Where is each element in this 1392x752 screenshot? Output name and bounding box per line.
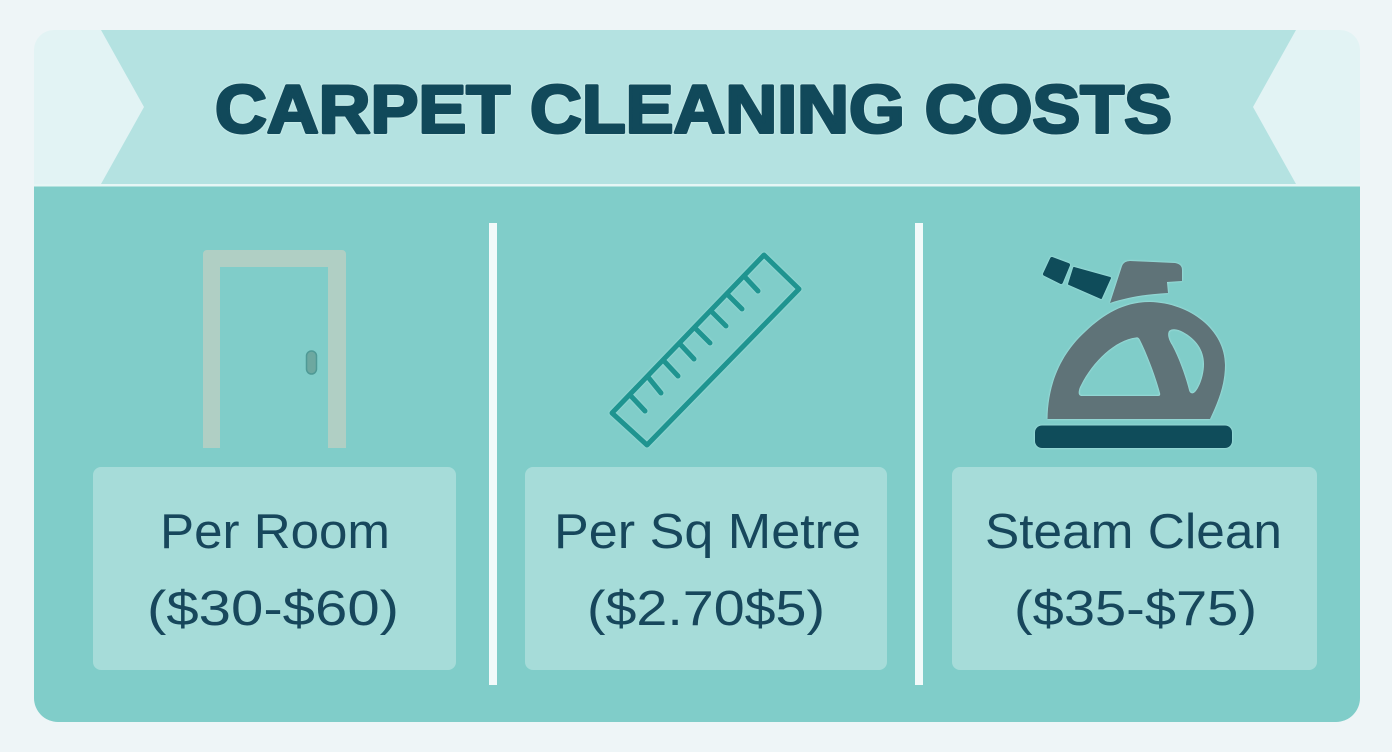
label: per sq metre: Per Sq Metre	[554, 505, 861, 559]
ribbon banner	[101, 30, 1296, 184]
icon: door	[203, 250, 346, 448]
panel: steam clean	[952, 467, 1317, 670]
panel: header background	[34, 30, 1360, 184]
icon: steam cleaner	[1035, 259, 1232, 448]
divider left	[489, 223, 497, 685]
label: per room: Per Room	[160, 505, 390, 559]
divider right	[915, 223, 923, 685]
price: per sq metre: ($2.70$5)	[587, 582, 825, 636]
panel: main teal body	[34, 185, 1360, 722]
header underline	[34, 184, 1360, 186]
price: steam clean: ($35-$75)	[1014, 582, 1257, 636]
title: CARPET CLEANING COSTS	[215, 72, 1172, 148]
panel: per sq metre	[525, 467, 887, 670]
label: steam clean: Steam Clean	[985, 505, 1282, 559]
price: per room: ($30-$60)	[147, 582, 399, 636]
panel: per room	[93, 467, 456, 670]
icon: ruler	[612, 255, 799, 445]
